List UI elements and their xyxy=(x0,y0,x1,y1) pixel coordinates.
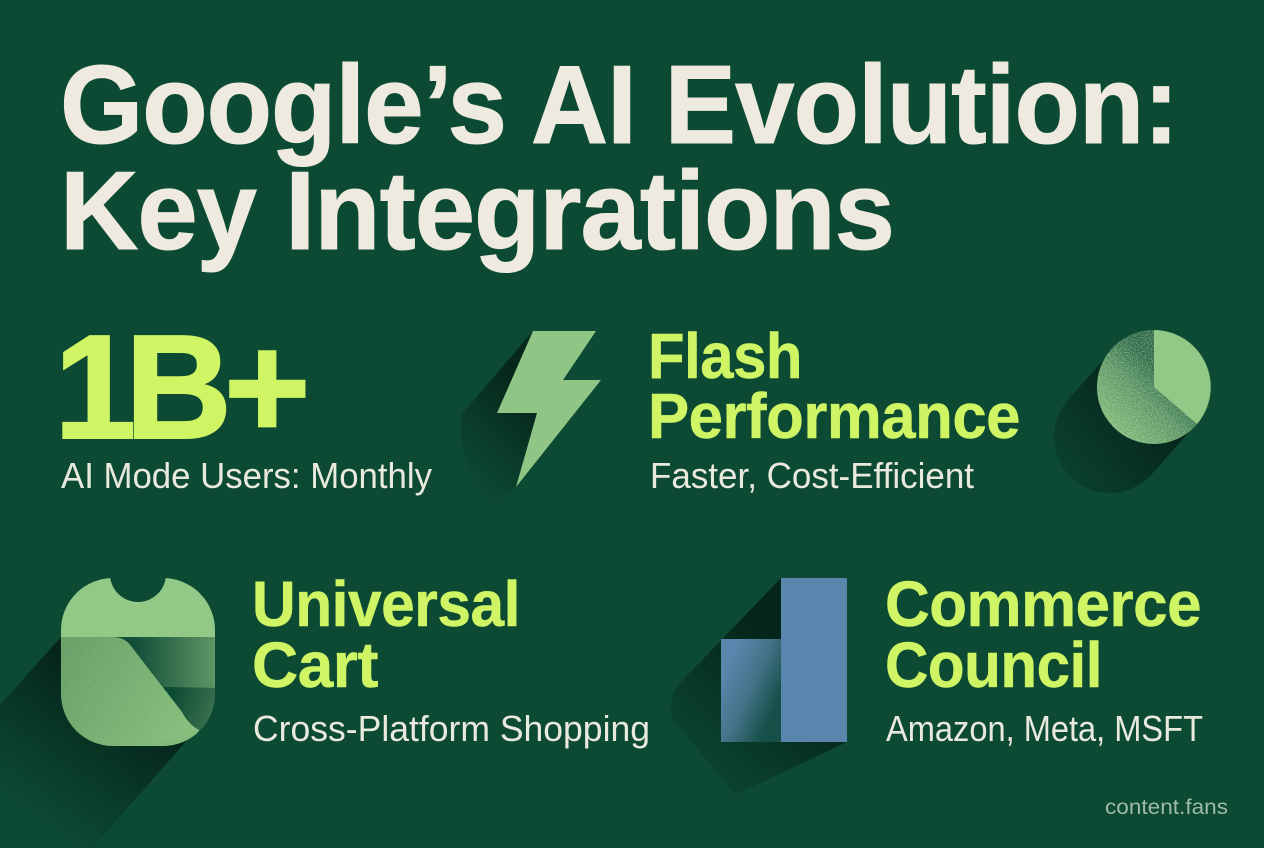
panel: commerce council xyxy=(885,568,1203,749)
title: Google’s AI Evolution: xyxy=(60,43,1178,167)
stat panel: 1B+ monthly users xyxy=(54,305,432,496)
heading xyxy=(648,320,1020,452)
heading: Performance xyxy=(648,380,1020,452)
title: Key Integrations xyxy=(60,149,894,273)
panel: flash performance xyxy=(648,320,1020,496)
heading xyxy=(885,568,1201,701)
title xyxy=(60,43,1178,273)
stat caption: AI Mode Users: Monthly xyxy=(61,455,432,496)
stat value: 1B+ xyxy=(54,305,310,470)
caption: Faster, Cost-Efficient xyxy=(650,455,974,496)
tall bar xyxy=(781,578,847,742)
heading: Flash xyxy=(648,320,802,392)
panel: universal cart xyxy=(252,568,650,749)
short bar xyxy=(721,639,781,742)
attribution: content.fans xyxy=(1105,796,1228,819)
caption: Amazon, Meta, MSFT xyxy=(886,708,1203,749)
heading: Commerce xyxy=(885,568,1201,640)
caption: Cross-Platform Shopping xyxy=(253,708,650,749)
icon: bar chart xyxy=(671,578,847,795)
heading: Council xyxy=(885,629,1102,701)
icon: universal cart xyxy=(0,578,215,830)
heading: Cart xyxy=(252,629,378,701)
heading xyxy=(252,568,520,701)
heading: Universal xyxy=(252,568,520,640)
icon: pie chart xyxy=(1097,330,1211,444)
icon: lightning bolt xyxy=(461,331,601,506)
